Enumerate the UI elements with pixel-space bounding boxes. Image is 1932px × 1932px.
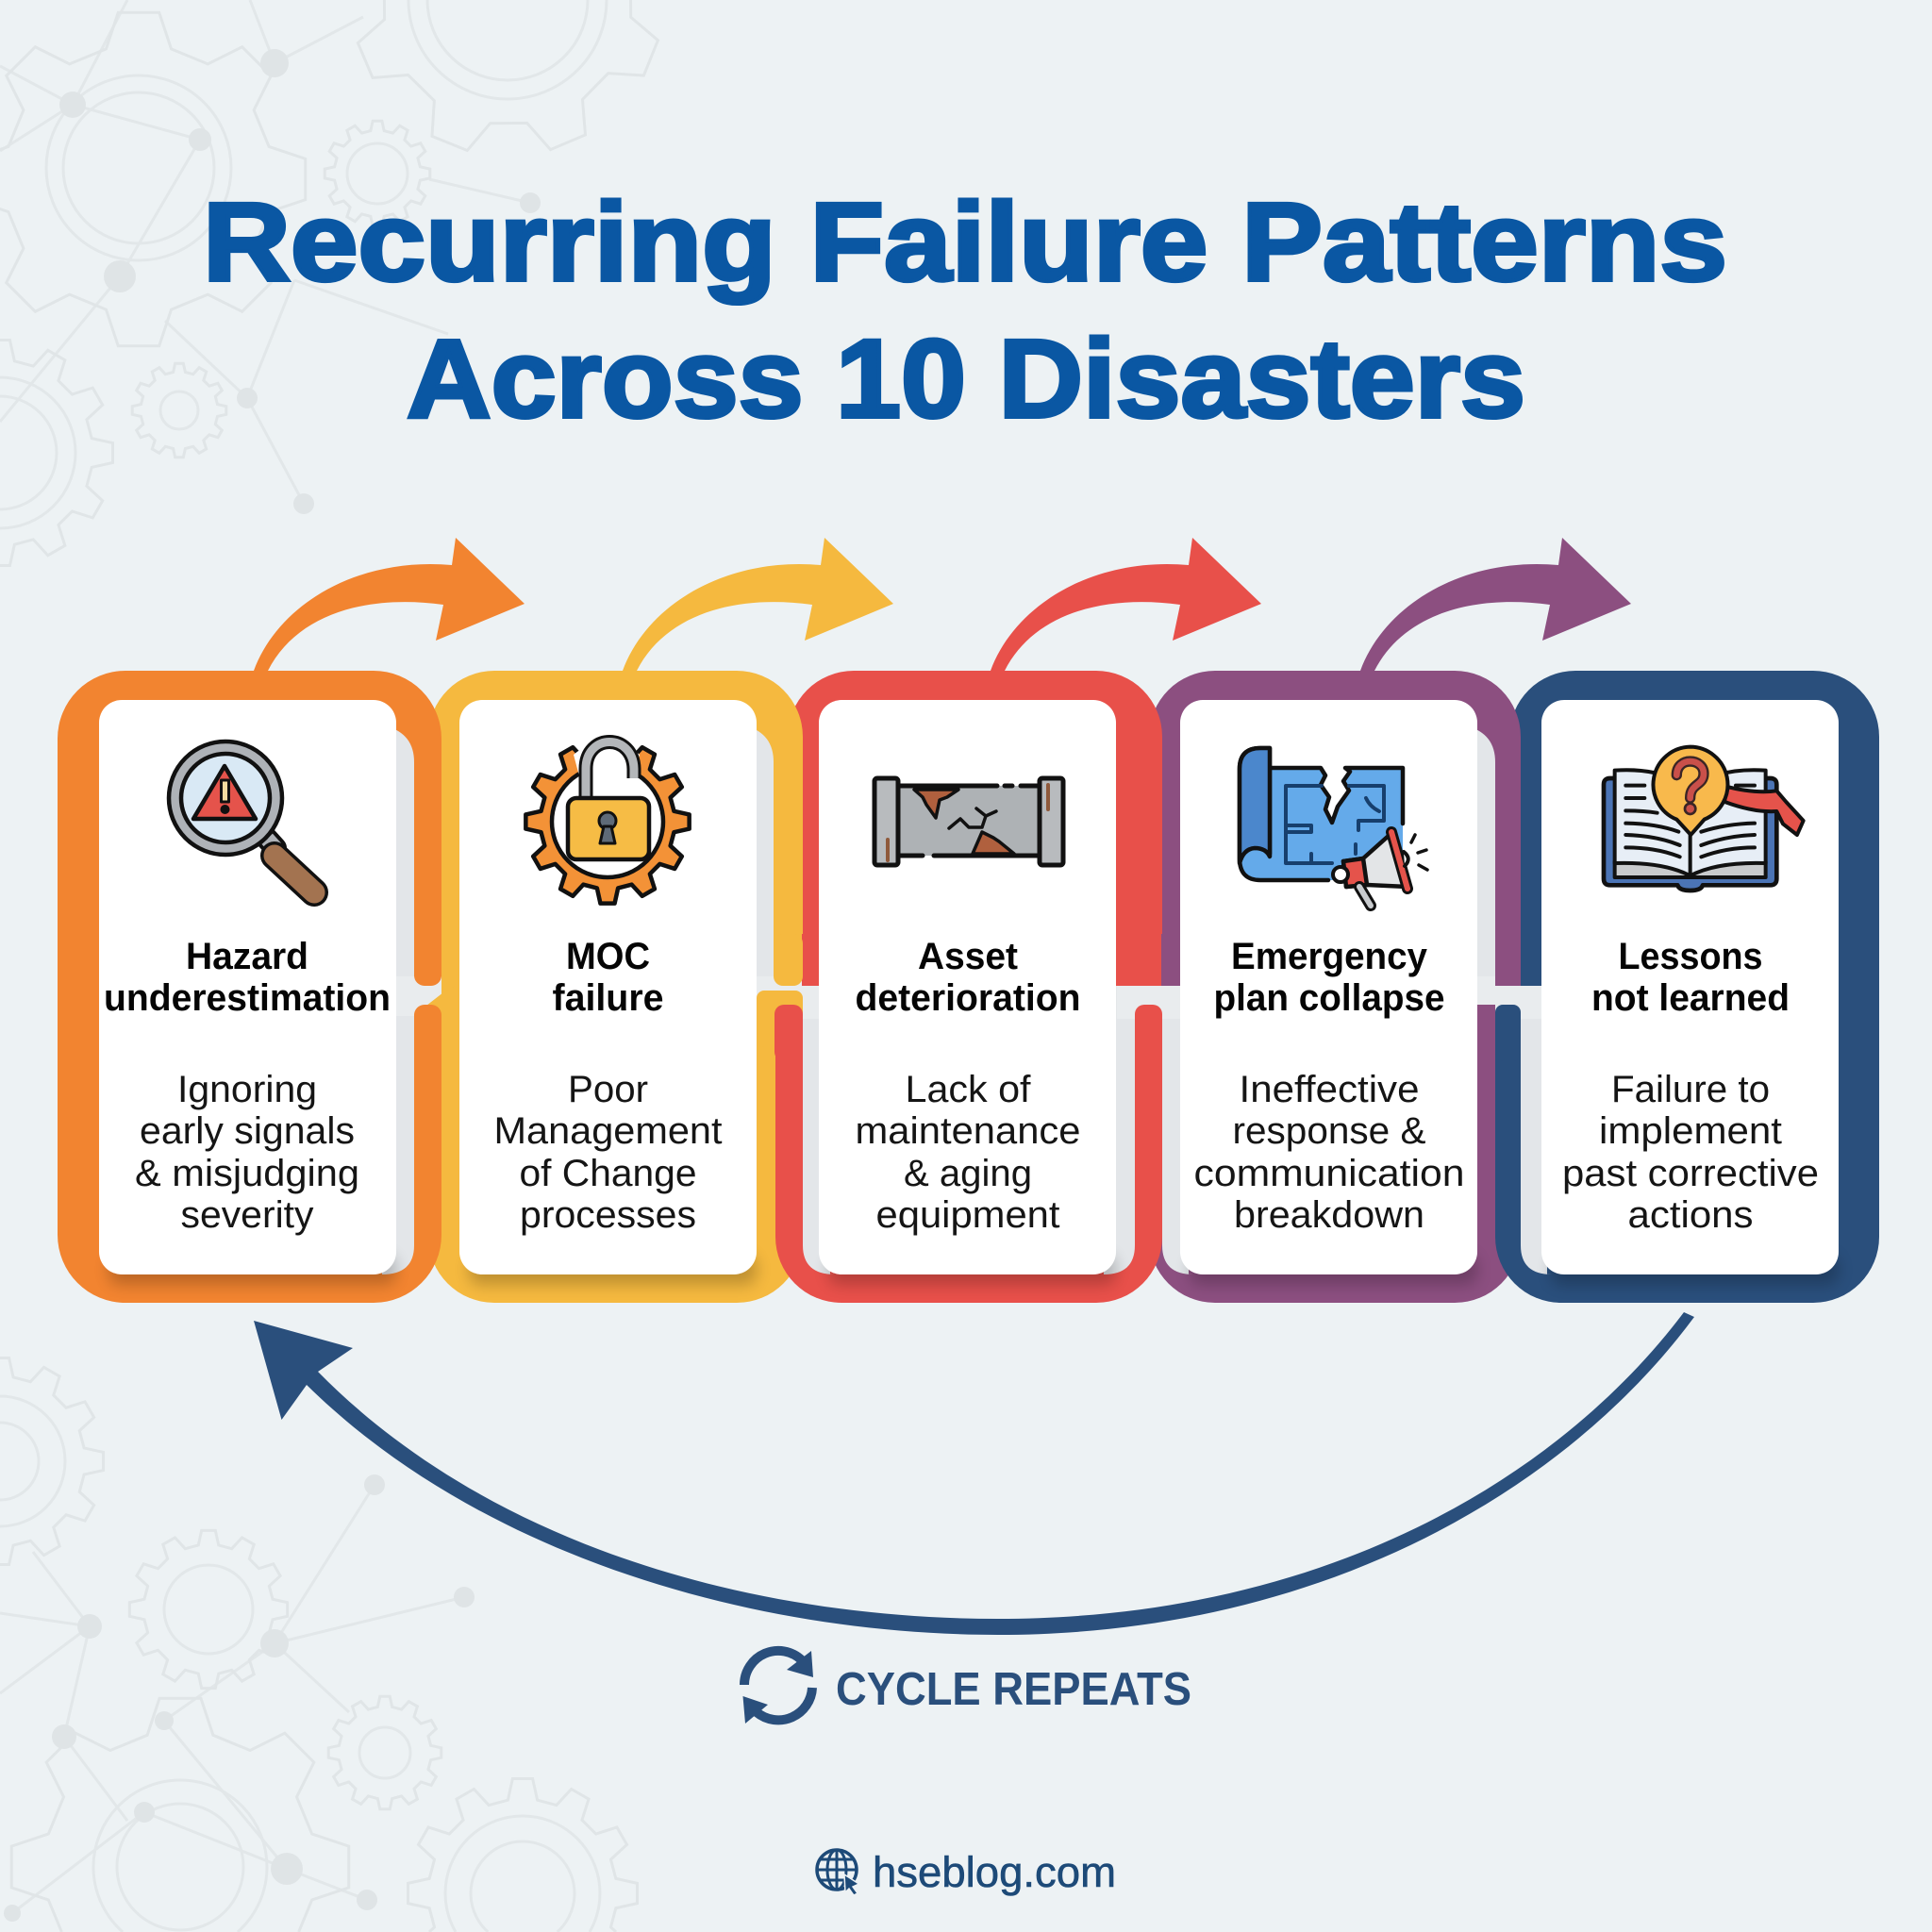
heading [553,936,664,1019]
interlocking coloured frames [58,671,1879,1303]
description [494,1069,723,1236]
description: implement [1599,1110,1782,1152]
icon: corroded cracked pipe [874,778,1063,865]
description: Ineffective [1240,1069,1419,1110]
background pattern: gears and network nodes [0,0,708,1932]
panel: emergency plan collapse card [1180,700,1477,1274]
heading: Hazard [186,936,308,977]
description: severity [181,1194,313,1236]
description: of Change [519,1153,696,1194]
description: equipment [875,1194,1060,1236]
arrow: orange step arrow [254,538,525,671]
description: breakdown [1234,1194,1424,1236]
icon: torn blueprint with megaphone [1240,748,1427,906]
description: Ignoring [177,1069,317,1110]
footer: website: hseblog.com [873,1848,1116,1896]
description: maintenance [855,1110,1081,1152]
panel: asset deterioration card [819,700,1116,1274]
title: Recurring Failure Patterns [203,180,1727,305]
description: past corrective [1562,1153,1819,1194]
heading [855,936,1081,1019]
description: Lack of [906,1069,1031,1110]
heading: MOC [566,936,650,977]
arrow: return loop from last card to first [254,1312,1694,1635]
heading: underestimation [104,977,391,1019]
heading: failure [553,977,664,1019]
description [1562,1069,1819,1236]
description [855,1069,1081,1236]
title [203,180,1727,441]
description: Poor [568,1069,648,1110]
heading: not learned [1591,977,1790,1019]
description: processes [520,1194,696,1236]
heading: Emergency [1231,936,1428,977]
title: Across 10 Disasters [407,317,1525,441]
icon: open book with question mark [1604,747,1804,891]
arrow: yellow step arrow [623,538,893,671]
icon: cycle arrows [743,1651,813,1724]
description: actions [1628,1194,1753,1236]
heading: Lessons [1619,936,1762,977]
description: response & [1232,1110,1426,1152]
heading: deterioration [855,977,1081,1019]
arrow: purple step arrow [1360,538,1631,671]
panel: MOC failure card [459,700,757,1274]
description: Failure to [1611,1069,1770,1110]
heading [1213,936,1445,1019]
description: early signals [140,1110,355,1152]
label: cycle repeats: CYCLE REPEATS [836,1664,1191,1715]
heading [1591,936,1790,1019]
description: communication [1194,1153,1464,1194]
description: & misjudging [135,1153,359,1194]
panel: lessons not learned card [1541,700,1839,1274]
description: & aging [904,1153,1032,1194]
heading [104,936,391,1019]
description: Management [494,1110,723,1152]
heading: Asset [918,936,1018,977]
icon: globe with cursor [817,1850,858,1895]
description [135,1069,359,1236]
heading: plan collapse [1213,977,1445,1019]
description [1194,1069,1464,1236]
icon: gear with broken padlock [525,740,690,904]
panel: hazard underestimation card [99,700,396,1274]
arrow: red step arrow [991,538,1261,671]
icon: magnifying glass with warning triangle [169,741,314,892]
